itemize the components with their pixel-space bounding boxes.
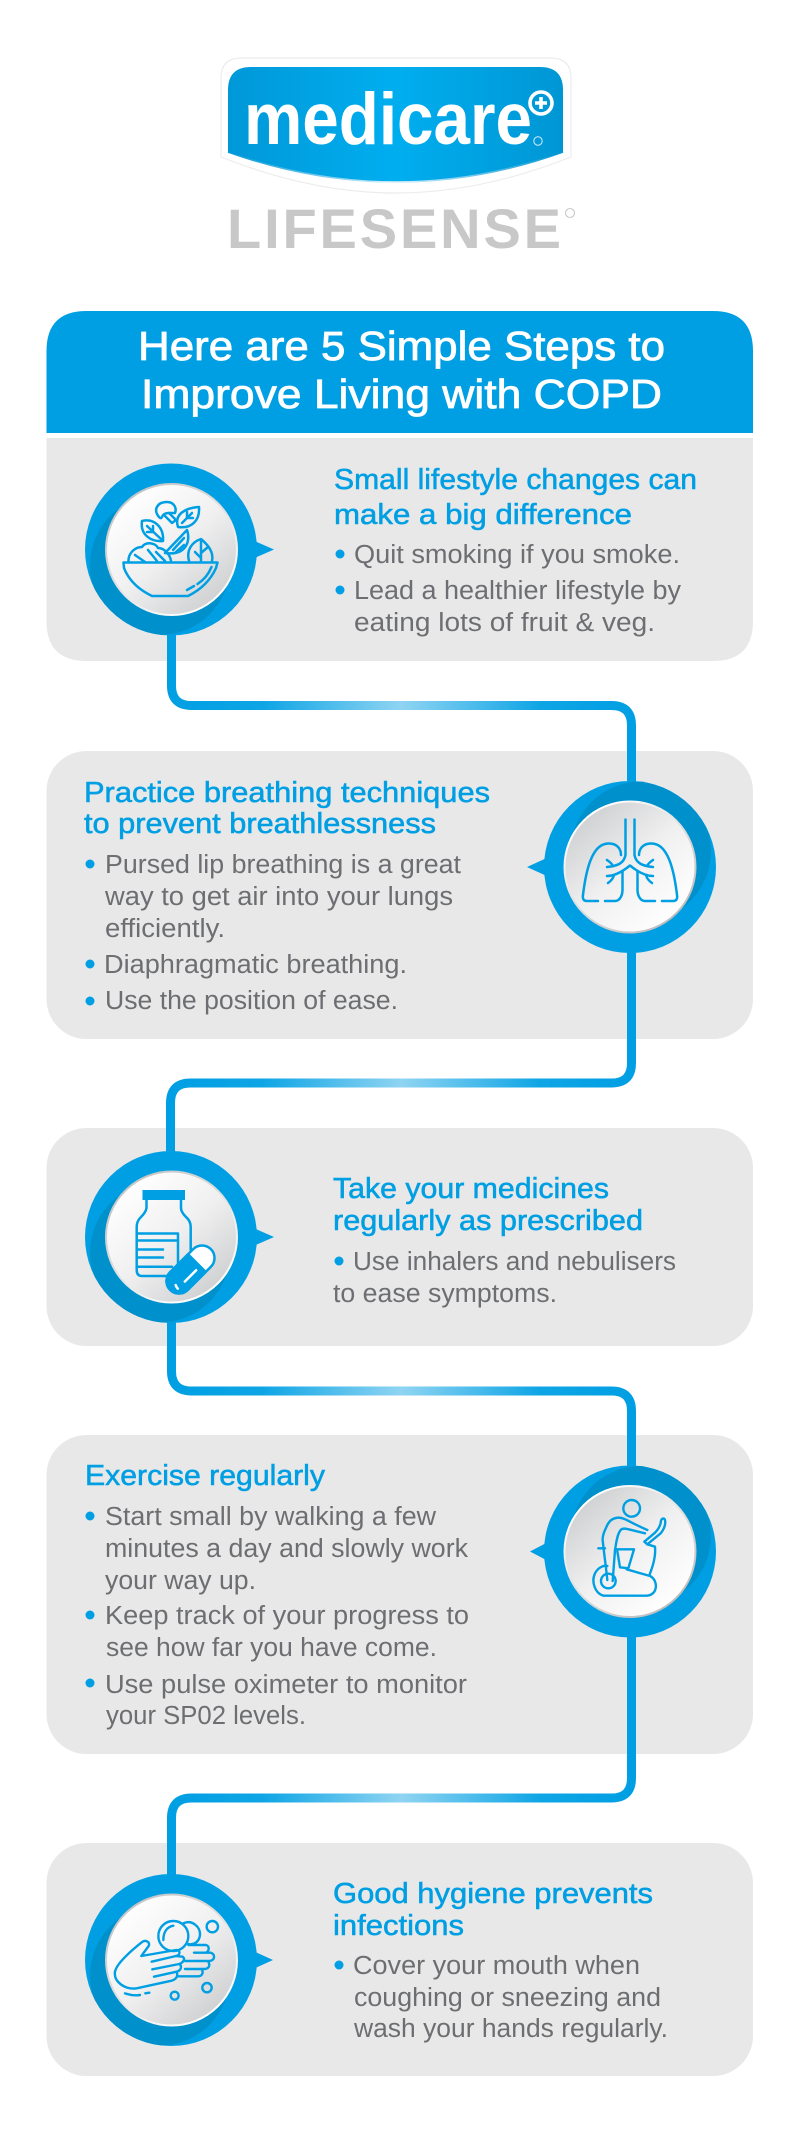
- heading: step 1: [334, 464, 697, 531]
- step 3 badge: [85, 1151, 274, 1323]
- bullets: step 5: coughing or sneezing and: [354, 1984, 661, 2012]
- title: Here are 5 Simple Steps to: [138, 323, 665, 369]
- arrow: connector step 4 to 5: [172, 1635, 632, 1878]
- logo: medicare: [221, 58, 571, 193]
- logo: medicare: medicare: [244, 79, 532, 160]
- panel: step 5 background: [46, 1843, 753, 2076]
- header banner: [46, 311, 753, 433]
- bullets: step 3: to ease symptoms.: [333, 1280, 557, 1308]
- heading: step 3: regularly as prescribed: [333, 1205, 643, 1237]
- step 5 badge: [85, 1874, 273, 2046]
- icon: exercise bike: [593, 1500, 665, 1596]
- step 4 badge: [530, 1466, 716, 1638]
- arrow: connector step 2 to 3: [170, 950, 632, 1155]
- bullets: step 4: Keep track of your progress to: [105, 1602, 469, 1630]
- panel: step 2 background: [46, 751, 753, 1039]
- panel: step 3 background: [46, 1128, 753, 1346]
- panel: step 1 background: [46, 438, 753, 661]
- arrow: connector step 3 to 4: [172, 1320, 632, 1470]
- title: Improve Living with COPD: [141, 371, 662, 417]
- icon: washing hands: [115, 1921, 218, 2000]
- bullets: step 4: your way up.: [105, 1567, 256, 1595]
- bullets: step 2: [86, 851, 461, 1015]
- bullets: step 4: your SP02 levels.: [106, 1702, 306, 1730]
- arrow: connector step 1 to 2: [172, 630, 632, 785]
- heading: step 2: Practice breathing techniques: [84, 777, 490, 809]
- heading: step 5: infections: [333, 1910, 464, 1942]
- bullets: step 2: way to get air into your lungs: [104, 883, 453, 911]
- bullets: step 1: Quit smoking if you smoke.: [354, 541, 680, 569]
- step 1 badge: [85, 464, 274, 636]
- bullets: step 1: [336, 541, 681, 637]
- text: step 3: [333, 1173, 676, 1308]
- panel: step 4 background: [46, 1435, 753, 1754]
- bullets: step 4: [86, 1503, 469, 1730]
- bullets: step 4: Use pulse oximeter to monitor: [105, 1671, 468, 1699]
- text: step 4: [85, 1460, 469, 1730]
- icon: medicine bottle and capsule: [137, 1190, 220, 1299]
- bullets: step 2: Diaphragmatic breathing.: [104, 951, 407, 979]
- heading: step 3: Take your medicines: [333, 1173, 609, 1205]
- heading: step 2: [84, 777, 490, 840]
- heading: step 4: Exercise regularly: [85, 1460, 326, 1492]
- bullets: step 5: [334, 1952, 668, 2043]
- icon: lungs: [583, 820, 677, 901]
- bullets: step 2: efficiently.: [105, 915, 225, 943]
- bullets: step 3: Use inhalers and nebulisers: [353, 1248, 676, 1276]
- text: step 2: [84, 777, 490, 1015]
- bullets: step 3: [333, 1248, 676, 1308]
- step 2 badge: [527, 781, 716, 953]
- title: [138, 323, 665, 417]
- bullets: step 2: Pursed lip breathing is a great: [105, 851, 461, 879]
- heading: step 3: [333, 1173, 643, 1237]
- bullets: step 2: Use the position of ease.: [105, 987, 398, 1015]
- heading: step 5: Good hygiene prevents: [333, 1878, 653, 1910]
- heading: step 1: Small lifestyle changes can: [334, 464, 697, 496]
- bullets: step 1: eating lots of fruit & veg.: [354, 609, 655, 637]
- text: step 1: [334, 464, 697, 637]
- bullets: step 4: minutes a day and slowly work: [105, 1535, 468, 1563]
- heading: step 2: to prevent breathlessness: [84, 808, 436, 840]
- bullets: step 1: Lead a healthier lifestyle by: [354, 577, 681, 605]
- heading: step 1: make a big difference: [334, 499, 632, 531]
- bullets: step 5: wash your hands regularly.: [353, 2015, 668, 2043]
- bullets: step 5: Cover your mouth when: [353, 1952, 640, 1980]
- text: step 5: [333, 1878, 668, 2043]
- bullets: step 4: see how far you have come.: [106, 1634, 437, 1662]
- bullets: step 4: Start small by walking a few: [105, 1503, 437, 1531]
- logo: lifesense: LIFESENSE: [227, 197, 561, 260]
- heading: step 5: [333, 1878, 653, 1942]
- icon: salad bowl: [124, 502, 218, 596]
